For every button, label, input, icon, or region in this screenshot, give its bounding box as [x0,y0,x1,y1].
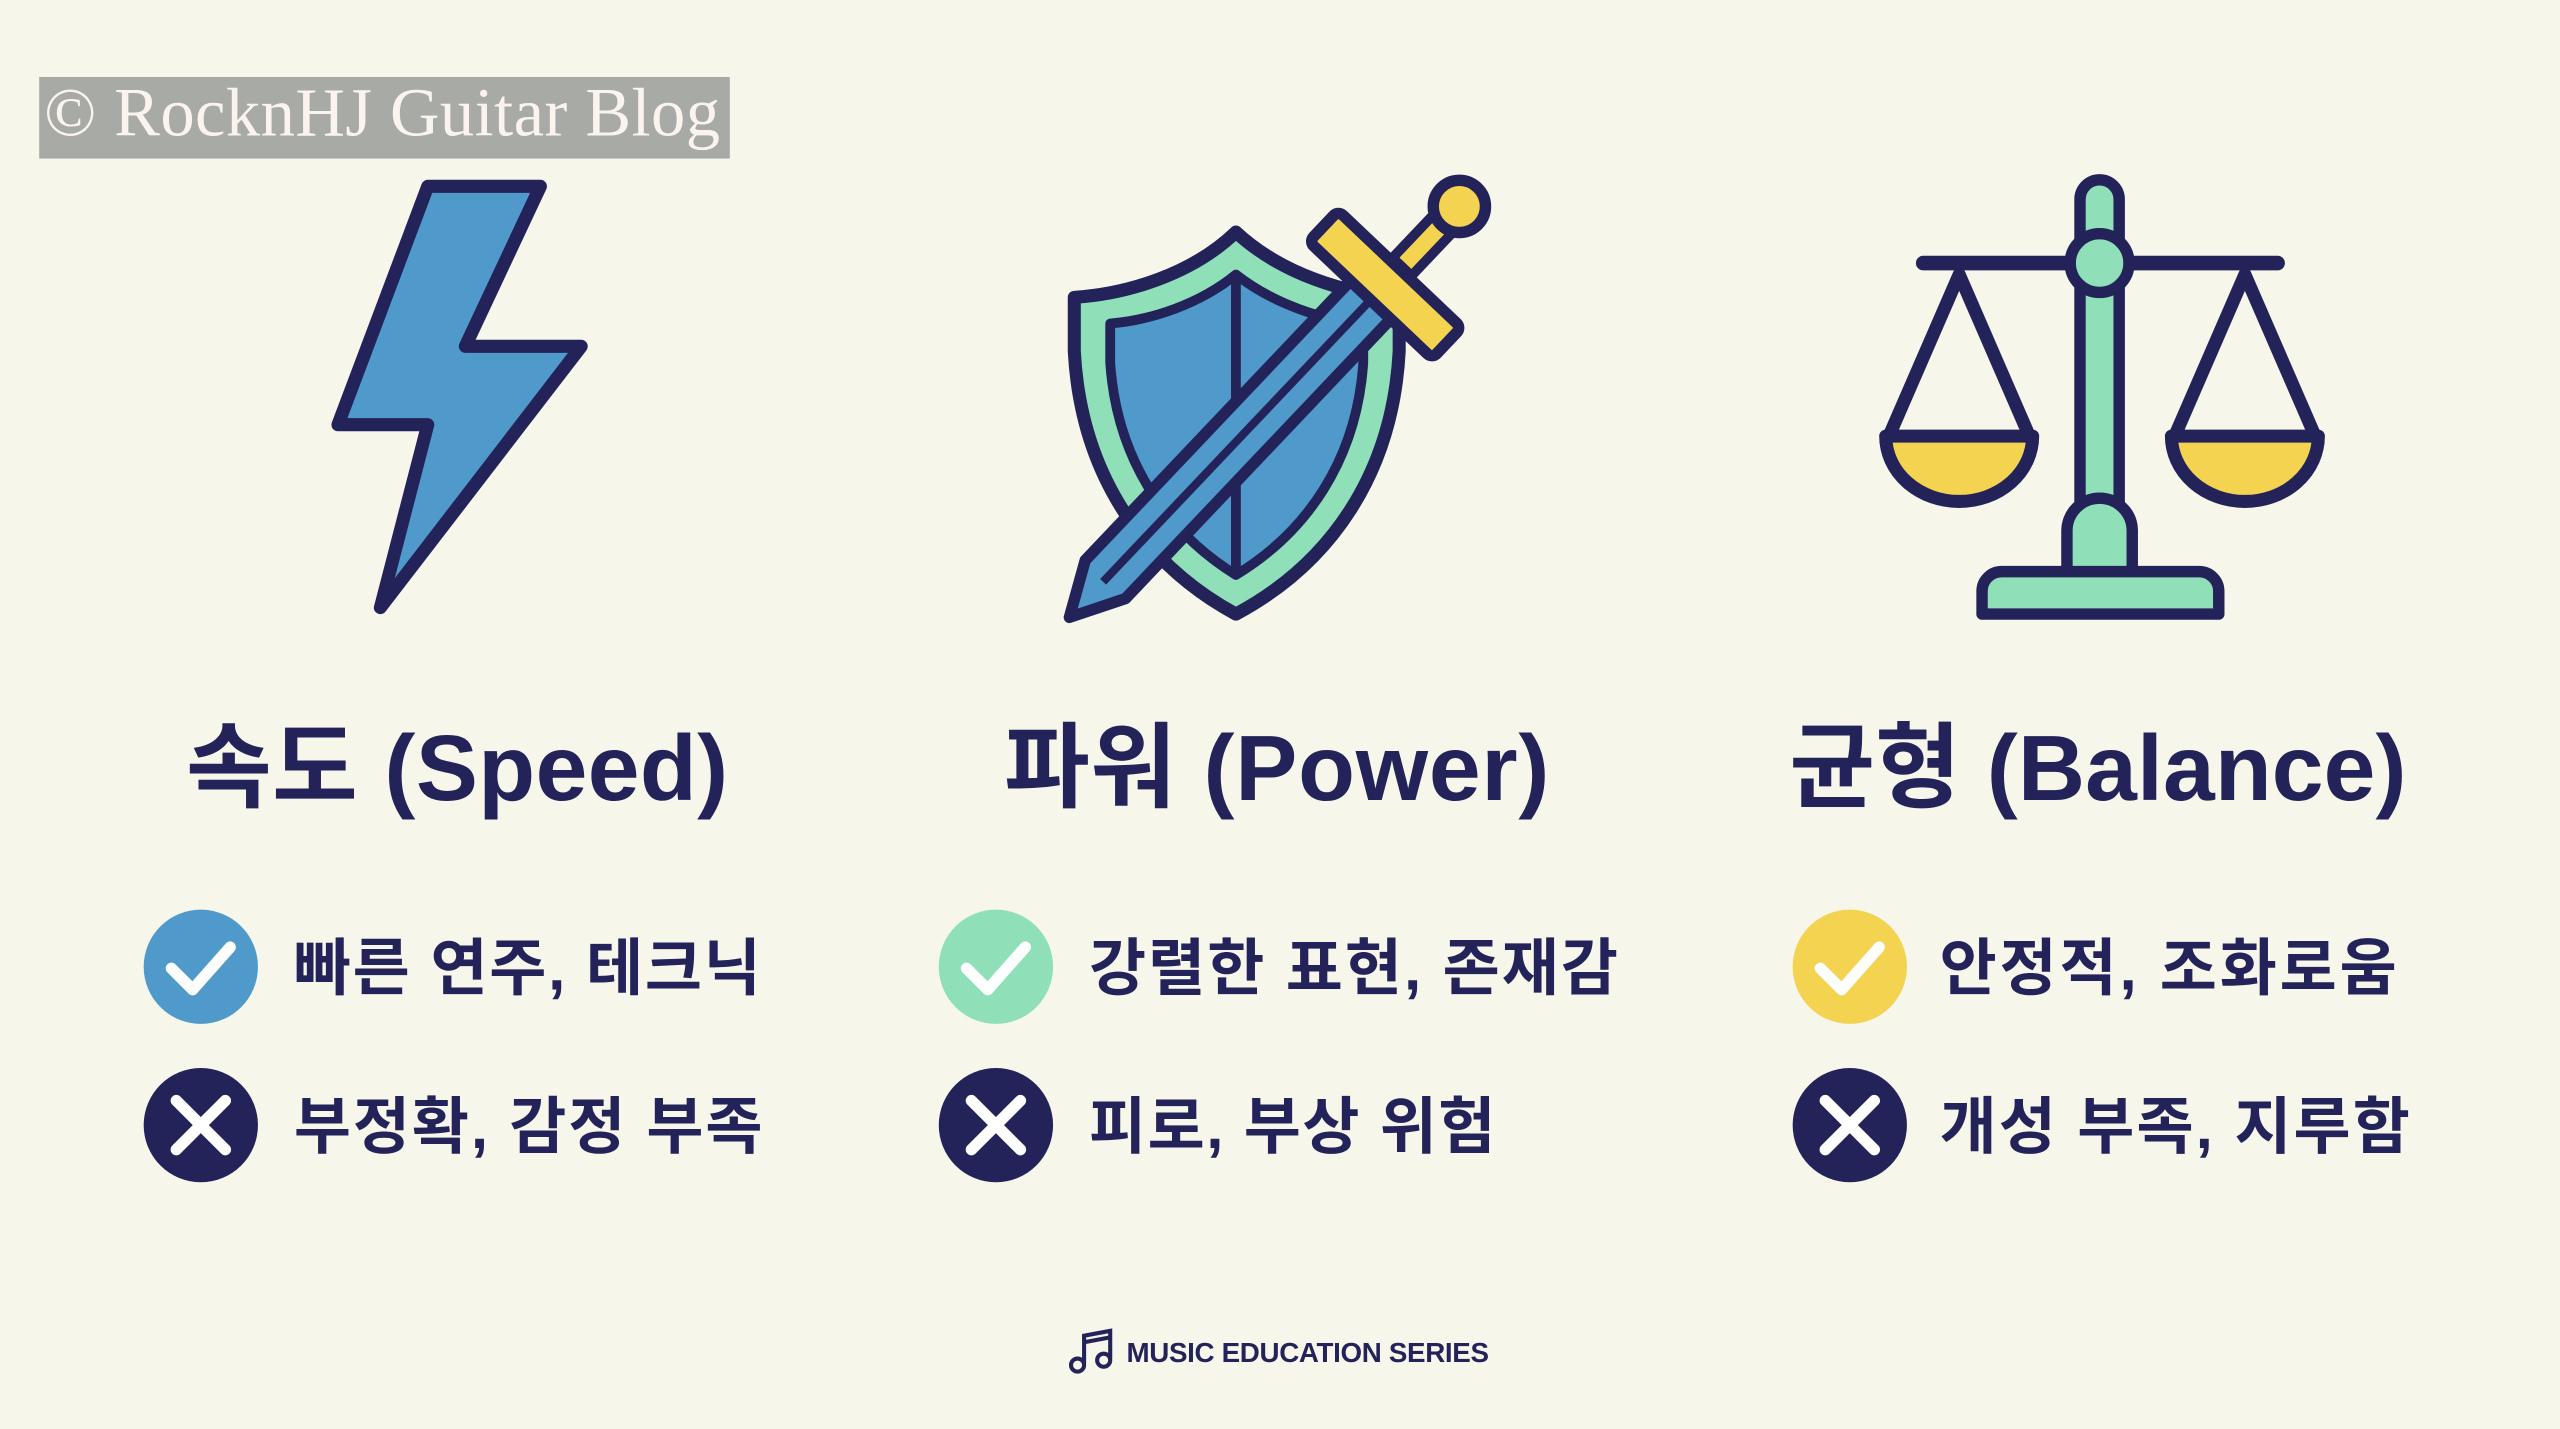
icon: lightning [338,186,581,608]
balance pros: 안정적, 조화로움 [1940,935,2397,1004]
speed cons: 부정확, 감정 부족 [294,1093,762,1162]
footer: music education series: MUSIC EDUCATION SERIES [1127,1337,1489,1368]
speed pros [144,910,761,1024]
power cons: 피로, 부상 위험 [1089,1093,1496,1162]
power cons [939,1068,1496,1182]
heading: power: 파워 (Power) [1004,716,1549,820]
watermark: © RocknHJ Guitar Blog [44,75,720,151]
speed pros: 빠른 연주, 테크닉 [294,935,761,1004]
heading: balance: 균형 (Balance) [1789,716,2407,820]
speed cons [144,1068,762,1182]
power pros: 강렬한 표현, 존재감 [1089,935,1618,1004]
power pros [939,910,1618,1024]
balance pros [1793,910,2397,1024]
footer: music education series [1071,1331,1489,1372]
icon: shield and sword [1008,129,1539,676]
balance cons [1793,1068,2410,1182]
icon: balance scale [1886,180,2318,614]
balance cons: 개성 부족, 지루함 [1940,1093,2410,1162]
heading: speed: 속도 (Speed) [186,716,728,820]
